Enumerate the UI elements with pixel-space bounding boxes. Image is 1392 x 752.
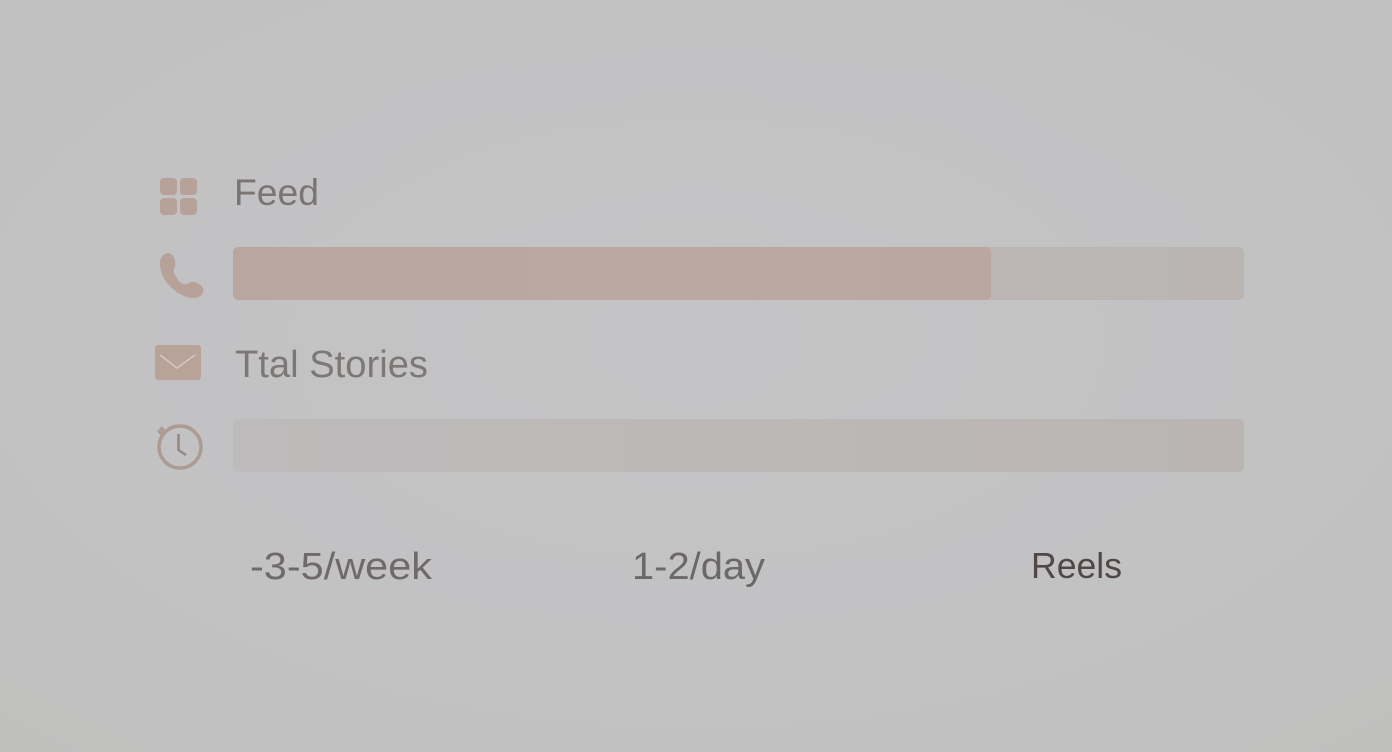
bar track [233,247,1244,300]
heading: Stories: Ttal Stories [235,344,428,386]
progress bar: Stories [233,419,1244,472]
heading: Feed: Feed [234,172,319,213]
icon: clock [157,426,201,468]
label: 3-5 per week: -3-5/week [250,546,433,588]
progress bar: Feed [233,247,1244,300]
label: Reels: Reels [1031,545,1122,586]
icon: grid [160,178,197,215]
icon: envelope [155,345,201,380]
label: 1-2 per day: 1-2/day [632,546,765,588]
icon: phone [160,253,204,298]
bar fill [233,247,991,300]
